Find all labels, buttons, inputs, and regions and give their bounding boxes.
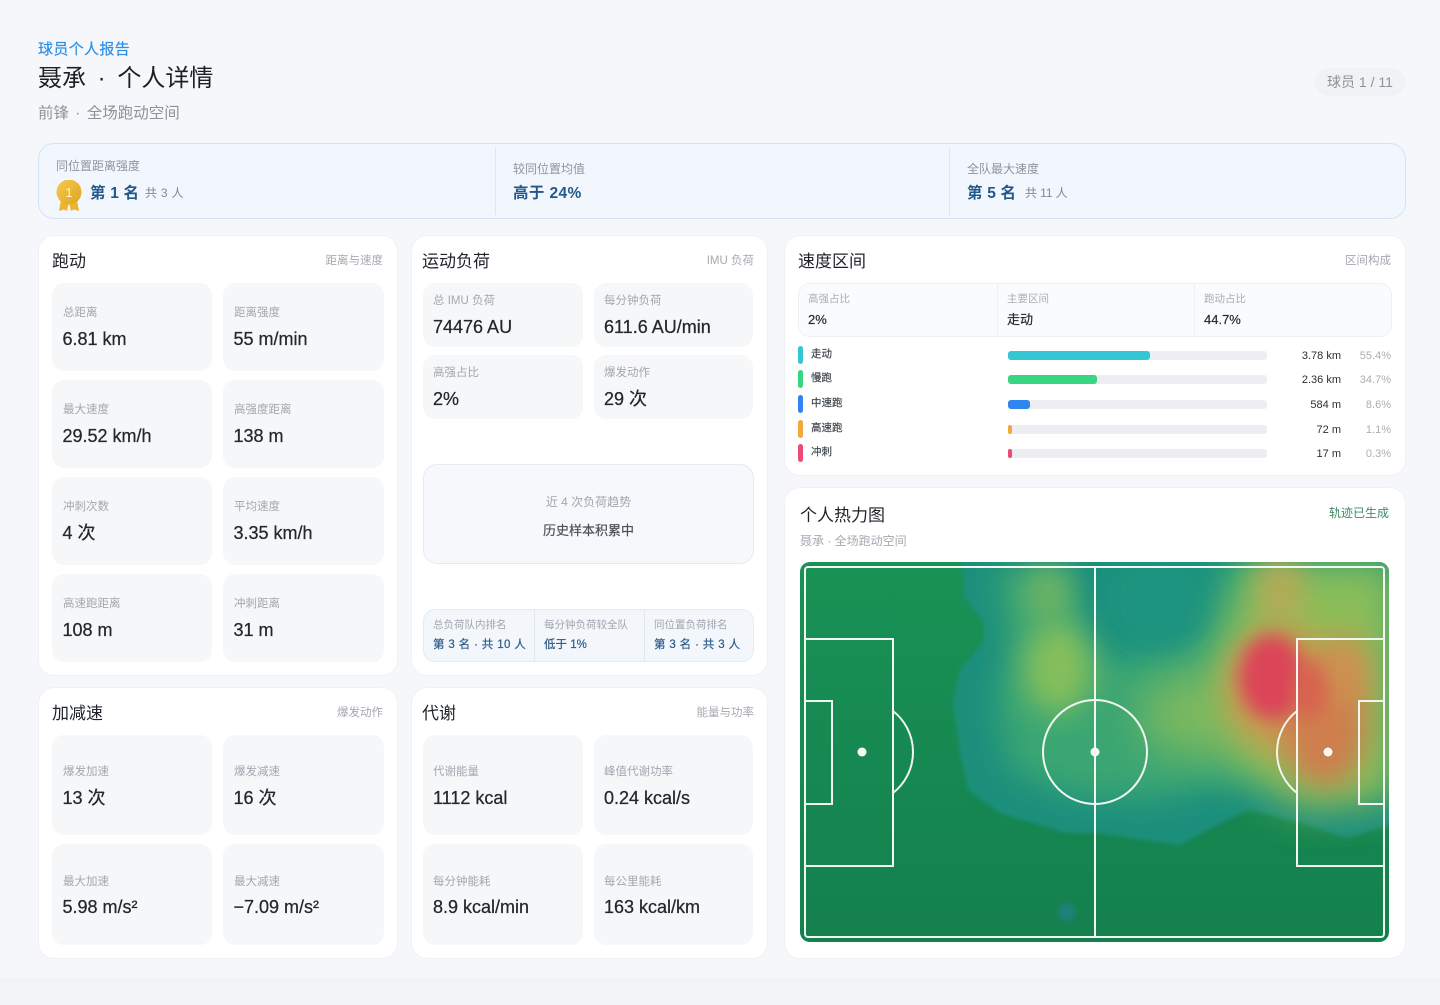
panel: running: 平均速度: [234, 501, 280, 513]
panel: metabolism: 能量与功率: [696, 707, 754, 719]
panel: speed zones: 速度区间: [798, 252, 866, 271]
banner item: distance intensity: 第 1 名: [90, 185, 139, 202]
zone summary strip: 高强占比: [808, 293, 850, 305]
load trend placeholder: [423, 464, 754, 564]
panel: load: 运动负荷: [422, 252, 490, 271]
banner item: compared to position: 高于 24%: [513, 185, 582, 202]
panel: acceleration: 16 次: [234, 788, 277, 808]
zone row: sprint: [798, 444, 1391, 462]
panel: load: 总 IMU 负荷: [433, 295, 495, 307]
zone row: jog: 34.7%: [1360, 374, 1391, 386]
panel: acceleration: 加减速: [52, 704, 103, 723]
zone summary strip: 2%: [808, 312, 827, 327]
panel: acceleration: 爆发动作: [337, 707, 383, 719]
panel: acceleration: 爆发加速: [63, 766, 109, 778]
panel: running: [39, 236, 397, 675]
banner divider: [495, 147, 496, 215]
zone summary strip: 44.7%: [1204, 312, 1241, 327]
zone row: high-speed run: 1.1%: [1366, 424, 1391, 436]
panel: personal heatmap: 个人热力图: [800, 506, 885, 525]
banner item: distance intensity: 同位置距离强度: [56, 159, 140, 173]
panel: metabolism: 1112 kcal: [433, 788, 507, 808]
zone summary strip: [798, 283, 1392, 337]
panel: running: 高强度距离: [234, 404, 292, 416]
zone row: high-speed run: [798, 420, 1391, 438]
load trend placeholder: 近 4 次负荷趋势: [546, 495, 631, 509]
load rank strip: 低于 1%: [544, 639, 587, 651]
banner item: compared to position: [513, 162, 585, 202]
panel: running: 最大速度: [63, 404, 109, 416]
panel: metabolism: 代谢能量: [433, 766, 479, 778]
zone row: jog: 慢跑: [811, 372, 832, 384]
panel: running: 108 m: [62, 620, 113, 640]
eyebrow: 球员个人报告: [38, 41, 130, 58]
zone row: high-speed run: 高速跑: [811, 422, 842, 434]
load rank strip: 第 3 名 · 共 3 人: [654, 639, 740, 651]
load rank strip: [423, 609, 754, 662]
panel: acceleration: −7.09 m/s²: [234, 897, 319, 917]
zone row: jog: 2.36 km: [1302, 374, 1341, 386]
load rank strip: 第 3 名 · 共 10 人: [433, 639, 526, 651]
panel: acceleration: [39, 688, 397, 958]
subtitle: 前锋 · 全场跑动空间: [38, 105, 180, 122]
panel: personal heatmap: [785, 488, 1405, 958]
zone summary strip: 主要区间: [1007, 293, 1049, 305]
panel: load: 74476 AU: [433, 317, 512, 337]
banner item: compared to position: 较同位置均值: [513, 162, 585, 176]
load trend placeholder: 历史样本积累中: [543, 523, 634, 538]
panel: running: 29.52 km/h: [62, 426, 152, 446]
panel: acceleration: 最大减速: [234, 876, 280, 888]
zone row: sprint: 冲刺: [811, 446, 832, 458]
panel: running: 跑动: [52, 252, 86, 271]
panel: running: 总距离: [63, 307, 98, 319]
panel: load: IMU 负荷: [707, 255, 754, 267]
zone row: medium run: 584 m: [1310, 399, 1341, 411]
ranking banner: [38, 143, 1406, 219]
banner divider: [949, 147, 950, 215]
banner item: top speed: [967, 162, 1068, 202]
panel: running: 距离强度: [234, 307, 280, 319]
banner item: top speed: 第 5 名: [967, 185, 1016, 202]
panel: running: 6.81 km: [62, 329, 127, 349]
player counter pill: 球员 1 / 11: [1327, 74, 1393, 90]
panel: load: 2%: [433, 389, 459, 409]
icon: gold medal: [56, 180, 82, 211]
zone row: jog: [798, 370, 1391, 388]
zone summary strip: 跑动占比: [1204, 293, 1246, 305]
heatmap pitch: [800, 562, 1389, 942]
zone row: walk: 走动: [811, 348, 832, 360]
panel: running: 55 m/min: [234, 329, 308, 349]
panel: running: 3.35 km/h: [234, 523, 313, 543]
banner item: top speed: 全队最大速度: [967, 162, 1039, 176]
zone row: medium run: 中速跑: [811, 397, 842, 409]
zone summary strip: 走动: [1007, 312, 1033, 327]
panel: load: 611.6 AU/min: [604, 317, 711, 337]
panel: metabolism: 8.9 kcal/min: [433, 897, 529, 917]
panel: load: 每分钟负荷: [604, 295, 662, 307]
panel: running: 距离与速度: [326, 255, 383, 267]
panel: load: 29 次: [604, 389, 647, 409]
panel: load: 爆发动作: [604, 367, 650, 379]
banner item: top speed: 共 11 人: [1025, 186, 1068, 200]
panel: metabolism: 峰值代谢功率: [604, 766, 673, 778]
panel: speed zones: [785, 236, 1405, 475]
panel: acceleration: 最大加速: [63, 876, 109, 888]
panel: personal heatmap: 轨迹已生成: [1329, 506, 1389, 520]
panel: metabolism: 0.24 kcal/s: [604, 788, 690, 808]
panel: running: 4 次: [62, 523, 96, 543]
heat layers: [953, 550, 1395, 922]
load rank strip: 每分钟负荷较全队: [544, 619, 628, 631]
zone row: medium run: 8.6%: [1366, 399, 1391, 411]
pitch lines: [805, 567, 1384, 937]
panel: running: 高速跑距离: [63, 598, 120, 610]
panel: metabolism: 每分钟能耗: [433, 876, 490, 888]
panel: running: 冲刺距离: [234, 598, 280, 610]
panel: metabolism: 代谢: [422, 704, 456, 723]
title: 聂承 · 个人详情: [38, 65, 213, 92]
banner item: distance intensity: 共 3 人: [145, 186, 184, 200]
panel: metabolism: [412, 688, 767, 958]
panel: speed zones: 区间构成: [1345, 255, 1391, 267]
panel: load: [412, 236, 767, 675]
icon: gold medal: 1: [65, 185, 73, 200]
zone row: walk: 3.78 km: [1302, 350, 1341, 362]
panel: metabolism: 163 kcal/km: [604, 897, 700, 917]
zone row: high-speed run: 72 m: [1317, 424, 1341, 436]
zone row: walk: [798, 346, 1391, 364]
player counter pill: [1315, 68, 1405, 96]
header: [38, 41, 1393, 122]
zone row: medium run: [798, 395, 1391, 413]
panel: acceleration: 爆发减速: [234, 766, 280, 778]
panel: running: 138 m: [234, 426, 284, 446]
zone row: walk: 55.4%: [1360, 350, 1391, 362]
zone row: sprint: 0.3%: [1366, 448, 1391, 460]
panel: running: 冲刺次数: [63, 501, 109, 513]
panel: acceleration: 5.98 m/s²: [62, 897, 138, 917]
panel: load: 高强占比: [433, 367, 479, 379]
load rank strip: 同位置负荷排名: [654, 619, 728, 631]
panel: metabolism: 每公里能耗: [604, 876, 662, 888]
zone row: sprint: 17 m: [1317, 448, 1341, 460]
panel: acceleration: 13 次: [62, 788, 106, 808]
banner item: distance intensity: [56, 159, 184, 211]
panel: personal heatmap: 聂承 · 全场跑动空间: [800, 534, 907, 548]
load rank strip: 总负荷队内排名: [433, 619, 506, 631]
panel: running: 31 m: [234, 620, 274, 640]
